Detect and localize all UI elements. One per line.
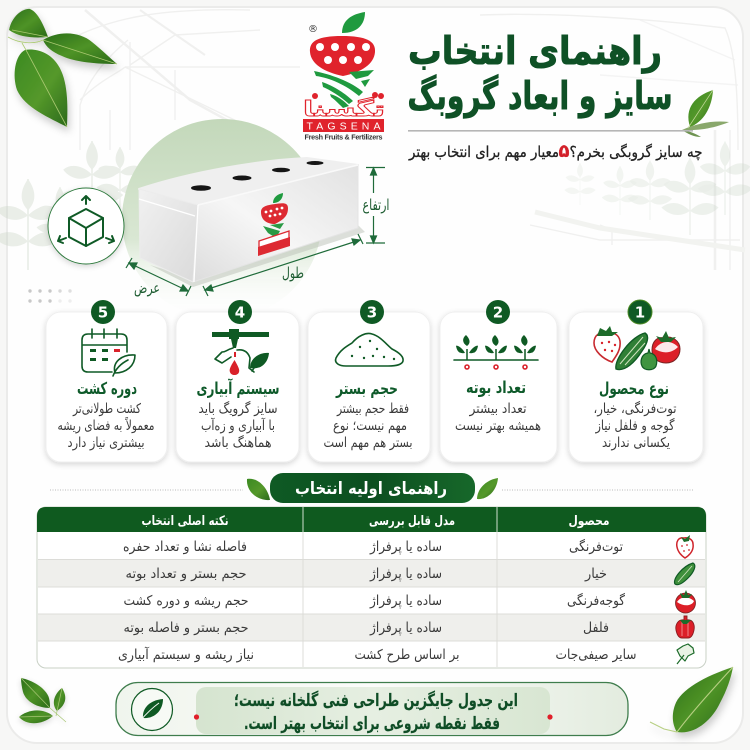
heading: حجم بستر: [335, 379, 398, 399]
icon: soil mound: [336, 333, 403, 366]
bottom-right leaf: [650, 667, 733, 732]
row: cucumber: خیار: [584, 566, 607, 582]
badge 1: 1: [635, 304, 645, 322]
logo leaf: [342, 12, 365, 33]
text: [58, 401, 154, 451]
text: [455, 401, 541, 434]
text: [324, 401, 412, 451]
subtitle: چه سایز گروبگی بخرم؟: [570, 143, 702, 161]
text: هماهنگ باشد: [204, 435, 272, 451]
text: معمولاً به فضای ریشه: [58, 416, 154, 434]
logo: [303, 12, 385, 142]
text: همیشه بهتر نیست: [455, 418, 541, 434]
bag holes: [191, 161, 324, 191]
heading: نوع محصول: [599, 379, 669, 399]
row: pepper: فلفل: [583, 620, 609, 636]
callout text: این جدول جایگزین طراحی فنی گلخانه نیست؛: [234, 690, 518, 711]
row: tomato: حجم ریشه و دوره کشت: [124, 593, 248, 609]
subtitle: [408, 141, 702, 162]
text: [594, 400, 677, 451]
callout frame: [116, 682, 628, 736]
icon: dimensions cube: [48, 188, 124, 264]
text: گوجه و فلفل نیاز: [595, 417, 675, 434]
badge 4: [228, 300, 252, 324]
icon: calendar: [82, 329, 135, 376]
row: other greens: نیاز ریشه و سیستم آبیاری: [118, 646, 254, 663]
icon: drip: [212, 329, 269, 375]
callout inner band: [196, 687, 550, 734]
row: other greens: بر اساس طرح کشت: [354, 647, 460, 663]
callout dots: [194, 714, 553, 720]
table header: مدل قابل بررسی: [369, 514, 455, 529]
badge 3: 3: [367, 304, 377, 322]
pill: [270, 473, 475, 503]
leaf right: [477, 478, 498, 499]
bag top: [139, 158, 358, 205]
row: other greens: سایر صیفی‌جات: [556, 647, 636, 663]
title divider: [408, 130, 693, 132]
section heading: راهنمای اولیه انتخاب: [295, 479, 447, 499]
row: tomato: ساده یا پرفراژ: [369, 593, 442, 609]
callout text: فقط نقطه شروعی برای انتخاب بهتر است.: [244, 714, 500, 734]
leaf left: [247, 479, 270, 500]
callout text: [234, 690, 518, 734]
text: سایز گرویگ باید: [198, 400, 278, 417]
table frame: [37, 507, 706, 668]
text: فقط حجم بیشتر: [336, 401, 409, 417]
row: pepper: [124, 616, 694, 638]
dimension: width: [126, 258, 191, 296]
name bar: [303, 119, 384, 132]
bag front: [193, 165, 358, 282]
text: بستر هم مهم است: [324, 435, 412, 451]
badge 5: [91, 300, 115, 324]
subtitle: معیار مهم برای انتخاب بهتر: [408, 143, 559, 161]
text: توت‌فرنگی، خیار،: [594, 400, 677, 417]
row: other greens: [118, 644, 694, 664]
row: tomato: [124, 590, 696, 613]
label: height: ارتفاع: [362, 196, 390, 214]
row: strawberry: ساده یا پرفراژ: [369, 539, 442, 555]
panel: irrigation: [176, 300, 299, 462]
dimension: length: [203, 234, 363, 296]
row: pepper: حجم بستر و فاصله بوته: [124, 620, 248, 636]
title: راهنمای انتخاب: [408, 29, 662, 73]
text: بیشتری نیاز دارد: [68, 435, 144, 451]
text: کشت طولانی‌تر: [72, 401, 141, 417]
tagline: Fresh Fruits & Fertilizers: [304, 132, 382, 142]
panel: crop cycle: [46, 300, 167, 462]
heading: تعداد بوته: [466, 378, 526, 398]
text: [198, 400, 278, 451]
heading: سیستم آبیاری: [196, 377, 280, 398]
text: تعداد بیشتر: [469, 401, 527, 417]
title leaf: [682, 90, 729, 137]
badge 1: [628, 300, 652, 324]
section heading: [50, 473, 693, 503]
row: cucumber: حجم بستر و تعداد بوته: [126, 566, 246, 582]
table header: محصول: [568, 514, 610, 529]
panel: substrate volume: [308, 300, 430, 462]
badge 2: 2: [493, 304, 503, 322]
text: با آبیاری و زه‌آب: [201, 417, 275, 434]
panel: plant count: [440, 300, 557, 462]
label: length: طول: [282, 264, 304, 282]
row: strawberry: توت‌فرنگی: [569, 538, 623, 555]
bottom-left leaves: [19, 678, 66, 723]
subtitle: ۵: [558, 141, 570, 162]
badge 4: 4: [235, 304, 245, 322]
badge 2: [486, 300, 510, 324]
text: مهم نیست؛ نوع: [333, 418, 407, 434]
row: tomato: گوجه‌فرنگی: [567, 592, 626, 609]
row: strawberry: [123, 535, 693, 558]
soft green circle: [122, 119, 322, 319]
title: [408, 29, 672, 119]
bag end: [139, 189, 198, 282]
icon: produce: [594, 326, 680, 370]
heading: دوره کشت: [77, 379, 137, 399]
plants background: [0, 141, 750, 270]
logo: TAGSENA: [306, 120, 380, 132]
badge 5: 5: [98, 304, 108, 322]
label: width: عرض: [134, 279, 160, 297]
registered mark: ®: [308, 24, 318, 35]
bag logo: [258, 193, 290, 256]
panel: crop type: [569, 300, 703, 462]
decorative dots: [28, 289, 72, 303]
text: یکسانی ندارند: [602, 435, 670, 451]
grow bag: [139, 158, 365, 287]
greenhouse background: [60, 10, 745, 270]
strawberry: [310, 36, 375, 76]
dimension: height: [366, 168, 385, 243]
row: cucumber: [126, 563, 695, 585]
icon: seedlings: [454, 335, 538, 369]
callout: [116, 682, 628, 736]
bag shadow: [150, 225, 365, 287]
row: pepper: ساده یا پرفراژ: [369, 620, 442, 636]
table: [37, 507, 706, 668]
icon: leaf badge: [132, 688, 172, 730]
wordmark: تگسنا: [303, 96, 385, 121]
table header: نکته اصلی انتخاب: [142, 514, 228, 529]
row: strawberry: فاصله نشا و تعداد حفره: [123, 539, 247, 555]
row: cucumber: ساده یا پرفراژ: [369, 566, 442, 582]
table header: [37, 507, 706, 532]
table rows shading: [38, 560, 705, 641]
leaves top-left: [8, 9, 117, 127]
badge 3: [360, 300, 384, 324]
